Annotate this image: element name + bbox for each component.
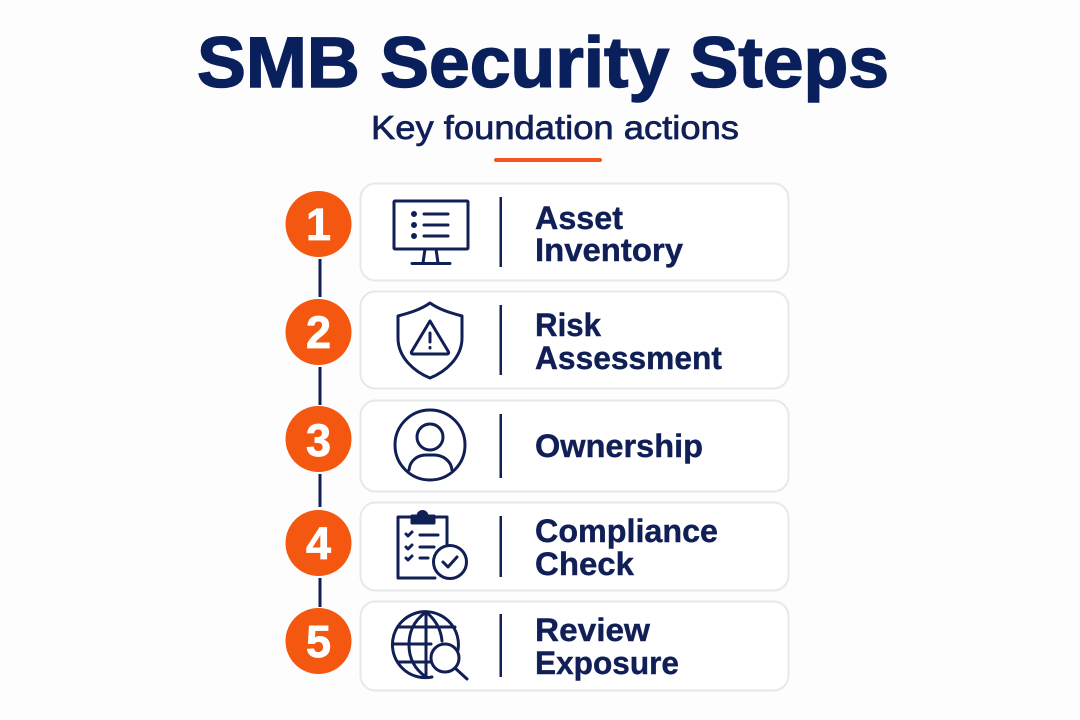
- step 1: [286, 184, 788, 280]
- step 1 card: [360, 184, 788, 280]
- title: SMB Security Steps: [197, 24, 889, 103]
- step 4 label: [535, 513, 718, 582]
- icon: user in circle: [395, 410, 465, 480]
- step 5 number badge: [286, 608, 352, 674]
- step 3 number badge: [286, 406, 352, 472]
- step 4 divider: [500, 516, 502, 577]
- step 3 divider: [500, 414, 502, 478]
- step 4 label: Check: [535, 546, 634, 582]
- step 1 label: Inventory: [535, 232, 683, 268]
- step 3 number badge: 3: [306, 415, 331, 466]
- step 2 label: Risk: [535, 307, 601, 343]
- step 5 number badge: 5: [306, 616, 331, 667]
- icon: monitor with list: [394, 201, 468, 264]
- step 4 label: Compliance: [535, 513, 718, 549]
- step 2: [286, 292, 788, 388]
- step 2 number badge: [286, 299, 352, 365]
- step 2 number badge: 2: [306, 307, 331, 358]
- step 3 label: Ownership: [535, 428, 703, 464]
- step 1 label: [535, 200, 683, 268]
- step 1 divider: [500, 197, 502, 267]
- icon: shield with warning: [398, 303, 462, 378]
- step 2 label: [535, 307, 722, 376]
- step 2 divider: [500, 305, 502, 375]
- step 5 label: [535, 612, 679, 681]
- subtitle: Key foundation actions: [371, 109, 739, 146]
- step 5 label: Exposure: [535, 645, 679, 681]
- step 4: [286, 502, 788, 590]
- icon: globe with magnifier: [392, 612, 467, 679]
- step 4 number badge: 4: [306, 518, 331, 569]
- step 1 label: Asset: [535, 200, 623, 236]
- step 4 card: [360, 502, 788, 590]
- step 3 card: [360, 400, 788, 492]
- timeline connectors: [318, 259, 322, 607]
- step 2 label: Assessment: [535, 340, 722, 376]
- step 3: [286, 400, 788, 492]
- step 4 number badge: [286, 510, 352, 576]
- step 1 number badge: [286, 191, 352, 257]
- step 2 card: [360, 292, 788, 388]
- step 5 card: [360, 602, 788, 690]
- step 5: [286, 602, 788, 690]
- icon: clipboard with check: [398, 512, 466, 578]
- step 5 label: Review: [535, 612, 650, 648]
- step 5 divider: [500, 614, 502, 677]
- title underline accent: [494, 158, 602, 162]
- step 1 number badge: 1: [306, 199, 331, 250]
